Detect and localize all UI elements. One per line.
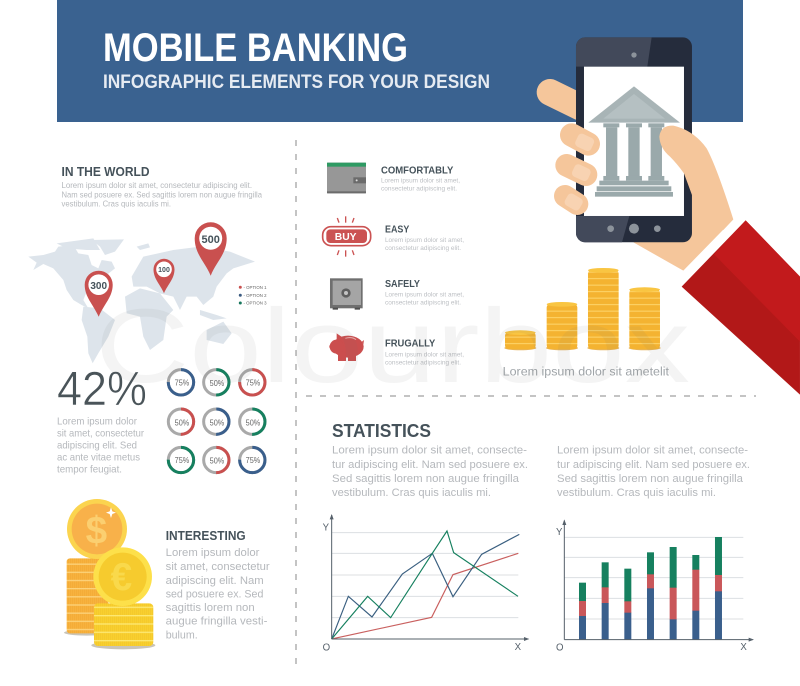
map legend: - OPTION 1 [244,285,267,290]
map legend: - OPTION 2 [244,293,267,298]
coin chart caption: Lorem ipsum dolor sit ametelit [503,365,670,379]
line chart: X [515,642,522,653]
text: frugally: consectetur adipiscing elit. [385,359,461,366]
panel: in the world [28,164,267,363]
line chart [323,514,529,653]
icon: piggy bank [329,333,364,361]
text: easy [385,237,464,252]
text block: statistics right: Lorem ipsum dolor sit amet, consecte- [557,444,748,456]
text: safely: Lorem ipsum dolor sit amet, [385,292,464,299]
thumb and palm [659,126,733,230]
text block: statistics left: tur adipiscing elit. Nam sed posuere ex. [332,459,528,471]
hand back [550,92,733,271]
bar stacks: gold coins [504,268,661,350]
text block: statistics right [557,444,750,499]
donut charts: 50% [210,418,224,427]
map legend [239,285,267,306]
pin: 300: 300 [90,281,107,292]
subtitle: INFOGRAPHIC ELEMENTS FOR YOUR DESIGN [103,72,490,93]
donut charts: 75% [175,456,189,465]
text block: 42 percent: ac ante vitae metus [57,452,140,464]
donut charts: 50% [210,379,224,388]
stacked bar chart: X [740,642,747,653]
pin: 100: 100 [158,267,170,274]
text: safely [385,292,464,307]
icon: gold coins: € [111,556,132,599]
header banner [57,0,743,122]
heading: in the world: IN THE WORLD [62,164,150,179]
text block: in the world [62,180,262,208]
donut charts: 50% [246,418,260,427]
text block: interesting [166,547,270,641]
donut charts: 50% [175,418,189,427]
text block: 42 percent: sit amet, consectetur [57,428,144,440]
text block: 42 percent: adipiscing elit. Sed [57,440,137,452]
text block: statistics right: vestibulum. Cras quis iaculis mi. [557,487,716,499]
heading: interesting: INTERESTING [166,529,246,543]
pin: 500 [195,222,227,276]
vertical divider [295,140,297,668]
panel: 42 percent [57,363,265,476]
text block: statistics right: tur adipiscing elit. Nam sed posuere ex. [557,459,750,471]
heading: statistics: STATISTICS [332,421,431,441]
text block: interesting: Lorem ipsum dolor [166,547,260,559]
text block: in the world: Nam sed posuere ex. Sed sagittis lorem non augue fringilla [62,190,262,200]
text block: statistics right: Sed sagittis lorem non augue fringilla [557,473,744,485]
panel: safely [330,278,464,310]
pin: 500: 500 [202,234,220,246]
sleeve [682,220,800,395]
panel: frugally [329,333,464,366]
icon: hand holding phone [550,37,800,395]
heading: comfortably: COMFORTABLY [381,164,453,176]
donut charts [168,370,265,473]
donut charts: 75% [246,456,260,465]
text: comfortably [381,178,460,193]
big number: 42% [57,363,147,416]
text block: 42 percent: tempor feugiat. [57,464,122,476]
panel: interesting [64,499,270,649]
icon: gold coins [64,499,155,649]
watermark: Colourbox [95,288,690,405]
donut charts: 75% [246,378,260,387]
icon: buy button: BUY [335,232,357,243]
stacked bar chart: Y [556,527,563,538]
text block: in the world: Lorem ipsum dolor sit amet, consectetur adipiscing elit. [62,180,252,190]
text: frugally [385,351,464,366]
text block: 42 percent: Lorem ipsum dolor [57,416,137,428]
finger nails [563,132,595,212]
fingers [565,135,588,204]
map legend: - OPTION 3 [244,301,267,306]
text block: statistics left: Lorem ipsum dolor sit amet, consecte- [332,444,527,456]
text block: interesting: sed posuere ex. Sed [166,588,263,600]
text: safely: consectetur adipiscing elit. [385,300,461,307]
text block: interesting: sagittis lorem non [166,602,255,614]
icon: safe [330,278,363,310]
text: easy: consectetur adipiscing elit. [385,245,461,252]
text: comfortably: consectetur adipiscing elit. [381,186,457,193]
panel: easy [323,216,464,257]
text block: interesting: adipiscing elit. Nam [166,575,264,587]
pin: 300 [85,271,113,317]
title: MOBILE BANKING [103,26,408,70]
line chart: O [323,642,331,653]
text: frugally: Lorem ipsum dolor sit amet, [385,351,464,358]
heading: frugally: FRUGALLY [385,338,435,350]
line chart: Y [323,523,330,534]
panel: comfortably [327,163,460,193]
world map [28,238,255,363]
phone [576,37,692,242]
text block: interesting: bulum. [166,629,198,641]
pin: 100 [154,259,174,293]
text block: interesting: augue fringilla vesti- [166,616,268,628]
icon: gold coins: $ [86,509,107,552]
icon: wallet [327,163,366,193]
text block: statistics left: vestibulum. Cras quis iaculis mi. [332,487,491,499]
panel: statistics [323,421,754,653]
heading: safely: SAFELY [385,278,420,290]
heading: easy: EASY [385,224,409,236]
stacked bar chart: O [556,642,564,653]
donut charts: 75% [175,378,189,387]
icon: bank building [588,86,680,197]
text block: in the world: vestibulum. Cras quis iaculis mi. [62,198,171,208]
text: comfortably: Lorem ipsum dolor sit amet, [381,178,460,185]
text block: 42 percent [57,416,144,476]
text block: interesting: sit amet, consectetur [166,561,270,573]
text block: statistics left [332,444,528,499]
donut charts: 50% [210,457,224,466]
icon: buy button [323,216,371,257]
text: easy: Lorem ipsum dolor sit amet, [385,237,464,244]
text block: statistics left: Sed sagittis lorem non augue fringilla [332,473,520,485]
stacked bar chart [556,519,754,653]
horizontal divider [306,395,756,397]
